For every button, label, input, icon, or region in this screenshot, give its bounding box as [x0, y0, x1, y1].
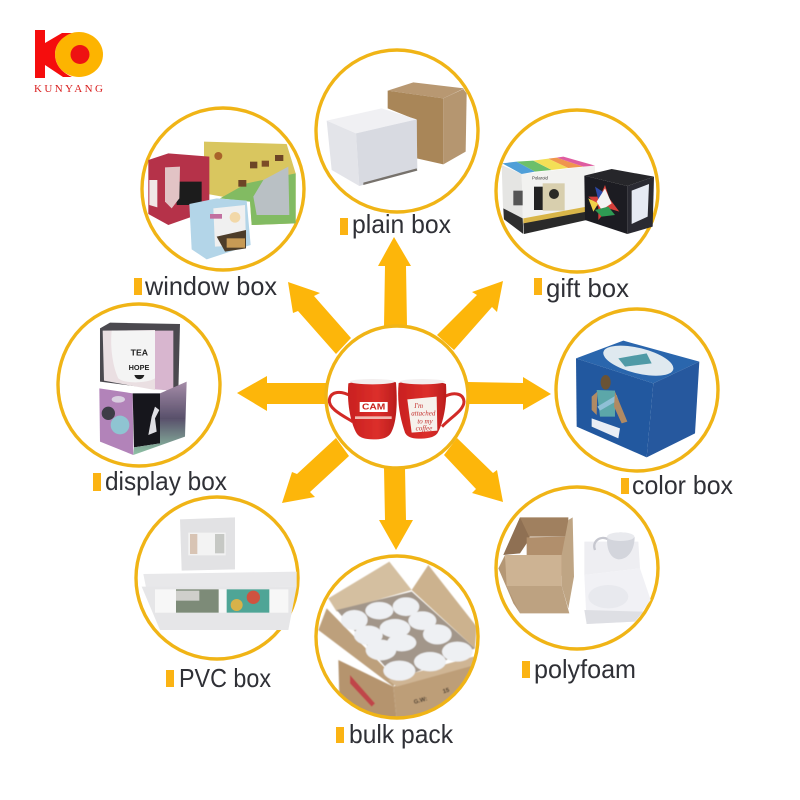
arrow: right to color box [468, 377, 551, 410]
mugs photo: I'm [413, 402, 423, 410]
label: plain box [352, 209, 451, 239]
circle frame [136, 497, 298, 659]
carton of mugs photo: G.W: [413, 696, 428, 706]
mugs photo: coffee [416, 425, 432, 433]
label marker [166, 670, 174, 687]
gift boxes photo: Polaroid [532, 176, 548, 181]
label: display box [105, 466, 227, 496]
mugs photo: to my [417, 417, 434, 425]
panel: color box [556, 309, 733, 500]
mugs photo: attached [411, 410, 436, 418]
center circle: red mugs [326, 326, 468, 468]
circle frame [496, 487, 658, 649]
logo wordmark: KUNYANG [34, 83, 103, 95]
label: window box [144, 271, 277, 301]
panel: polyfoam [496, 487, 658, 684]
mugs photo [329, 379, 464, 439]
arrow: left to display box [237, 376, 327, 411]
label: gift box [546, 273, 629, 303]
label: bulk pack [349, 719, 454, 749]
gift boxes photo [502, 157, 654, 234]
logo: Kunyang [34, 30, 103, 95]
circle frame [316, 50, 478, 212]
label: polyfoam [534, 654, 636, 684]
label marker [621, 478, 629, 494]
arrow: up to plain box [378, 237, 411, 326]
panel: PVC box [136, 497, 298, 693]
circle frame [316, 556, 478, 718]
label marker [134, 278, 142, 295]
logo mark [35, 30, 103, 78]
label marker [336, 727, 344, 743]
label marker [93, 473, 101, 491]
panel: plain box [316, 50, 478, 239]
carton of mugs photo [318, 562, 477, 720]
plain boxes photo [327, 82, 467, 186]
carton and foam photo [498, 517, 651, 624]
panel: display box [58, 304, 227, 496]
display boxes photo: TEA [131, 347, 149, 357]
mugs photo: CAM [362, 403, 386, 412]
circle frame [142, 108, 304, 270]
label marker [522, 661, 530, 678]
circle outline [316, 556, 478, 718]
label marker [340, 218, 348, 235]
arrow: down-left to PVC box [282, 438, 349, 503]
panel: gift box [496, 110, 658, 303]
panel: window box [134, 108, 304, 301]
blue box photo [576, 340, 699, 457]
display boxes photo [99, 323, 187, 455]
window boxes photo [148, 142, 296, 259]
PVC boxes photo [142, 517, 297, 630]
panel: bulk pack [316, 556, 478, 749]
arrow: down to bulk pack [379, 468, 413, 550]
circle frame [58, 304, 220, 466]
label marker [534, 278, 542, 295]
arrow: up-right to gift box [437, 281, 503, 350]
label: PVC box [179, 663, 271, 693]
arrow: down-right to polyfoam [444, 438, 503, 502]
circle frame [556, 309, 718, 471]
display boxes photo: HOPE [129, 363, 149, 372]
circle frame [496, 110, 658, 272]
arrow: up-left to window box [288, 282, 351, 354]
carton of mugs photo: 15 [442, 687, 451, 695]
label: color box [632, 470, 733, 500]
